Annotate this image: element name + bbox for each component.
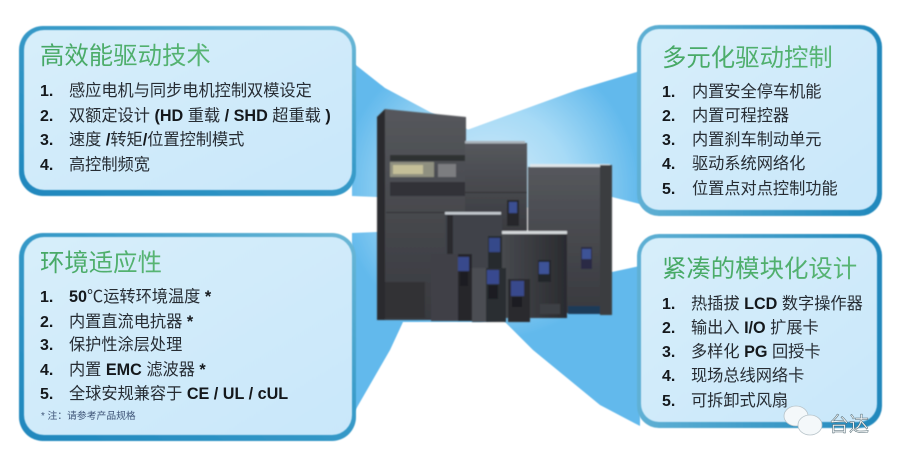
list: 3.	[662, 132, 675, 149]
panel fill	[641, 29, 877, 210]
list	[662, 83, 838, 198]
list: 4.	[40, 157, 53, 174]
panel: compact modular design	[637, 234, 882, 428]
drive: medium unit, back	[445, 212, 502, 304]
drive: small unit, left	[431, 254, 472, 321]
brand name: 台达	[829, 413, 869, 436]
list: 速度 /转矩/位置控制模式	[69, 131, 244, 149]
list: 1.	[40, 289, 53, 306]
wedge: upper right	[467, 71, 640, 215]
list	[40, 287, 288, 403]
list: 2.	[662, 108, 675, 125]
list: 5.	[662, 181, 675, 198]
blue light wedges behind the product	[352, 62, 640, 426]
list: 3.	[40, 337, 53, 354]
panel fill	[641, 238, 877, 422]
list: 热插拔 LCD 数字操作器	[691, 295, 863, 313]
list: 高控制频宽	[69, 156, 150, 174]
list: 内置刹车制动单元	[692, 131, 822, 149]
panel frame	[19, 26, 356, 196]
list: 驱动系统网络化	[692, 154, 805, 173]
panel frame	[637, 234, 882, 428]
list: 全球安规兼容于 CE / UL / cUL	[69, 385, 288, 403]
list: 4.	[662, 156, 675, 173]
list: 输出入 I/O 扩展卡	[691, 319, 819, 337]
list: 1.	[662, 296, 675, 313]
list: 可拆卸式风扇	[691, 392, 788, 410]
heading: 环境适应性	[40, 250, 162, 277]
list: 感应电机与同步电机控制双模设定	[69, 81, 312, 100]
panel frame	[637, 25, 882, 216]
drive: largest cabinet	[377, 109, 466, 320]
list: 内置 EMC 滤波器 *	[69, 361, 206, 379]
list: 双额定设计 (HD 重载 / SHD 超重载 )	[69, 107, 331, 125]
list: 2.	[40, 314, 53, 331]
heading: 紧凑的模块化设计	[662, 256, 857, 283]
list: 多样化 PG 回授卡	[691, 343, 821, 361]
wedge: lower left	[352, 215, 480, 416]
drive: third cabinet	[528, 164, 612, 315]
list: 保护性涂层处理	[69, 336, 182, 354]
list: 内置安全停车机能	[692, 83, 822, 101]
icon: chat bubbles	[784, 406, 822, 435]
list: 4.	[40, 362, 53, 379]
panel fill	[24, 30, 352, 190]
list	[40, 81, 331, 174]
wedge: upper left	[352, 62, 480, 215]
list: 现场总线网络卡	[691, 366, 804, 385]
heading: 多元化驱动控制	[662, 45, 833, 72]
heading: 高效能驱动技术	[40, 43, 211, 70]
list: 3.	[40, 132, 53, 149]
list: 2.	[662, 320, 675, 337]
list: 5.	[662, 393, 675, 410]
drive: medium unit, right	[502, 231, 567, 318]
list: 2.	[40, 108, 53, 125]
list: 内置直流电抗器 *	[69, 313, 194, 331]
list: 50℃运转环境温度 *	[69, 287, 212, 306]
list: 3.	[662, 344, 675, 361]
watermark: WeChat icon and brand name	[784, 406, 869, 436]
drive: small unit, center	[472, 268, 506, 322]
list: 内置可程控器	[692, 107, 789, 125]
list	[662, 295, 863, 410]
list: 1.	[662, 84, 675, 101]
drive: second cabinet	[465, 141, 527, 235]
product photo: family of drives	[377, 109, 612, 322]
list: 4.	[662, 368, 675, 385]
panel: high-efficiency drive technology	[19, 26, 356, 196]
panel fill	[24, 237, 352, 435]
list: 位置点对点控制功能	[692, 180, 838, 198]
panel: environmental adaptability	[19, 233, 356, 441]
list: 1.	[40, 83, 53, 100]
wedge: lower right	[480, 215, 640, 426]
list: 5.	[40, 386, 53, 403]
drive: small unit, front	[508, 279, 530, 322]
panel frame	[19, 233, 356, 441]
panel: diversified drive control	[637, 25, 882, 216]
footnote: * 注：请参考产品规格	[41, 409, 136, 422]
